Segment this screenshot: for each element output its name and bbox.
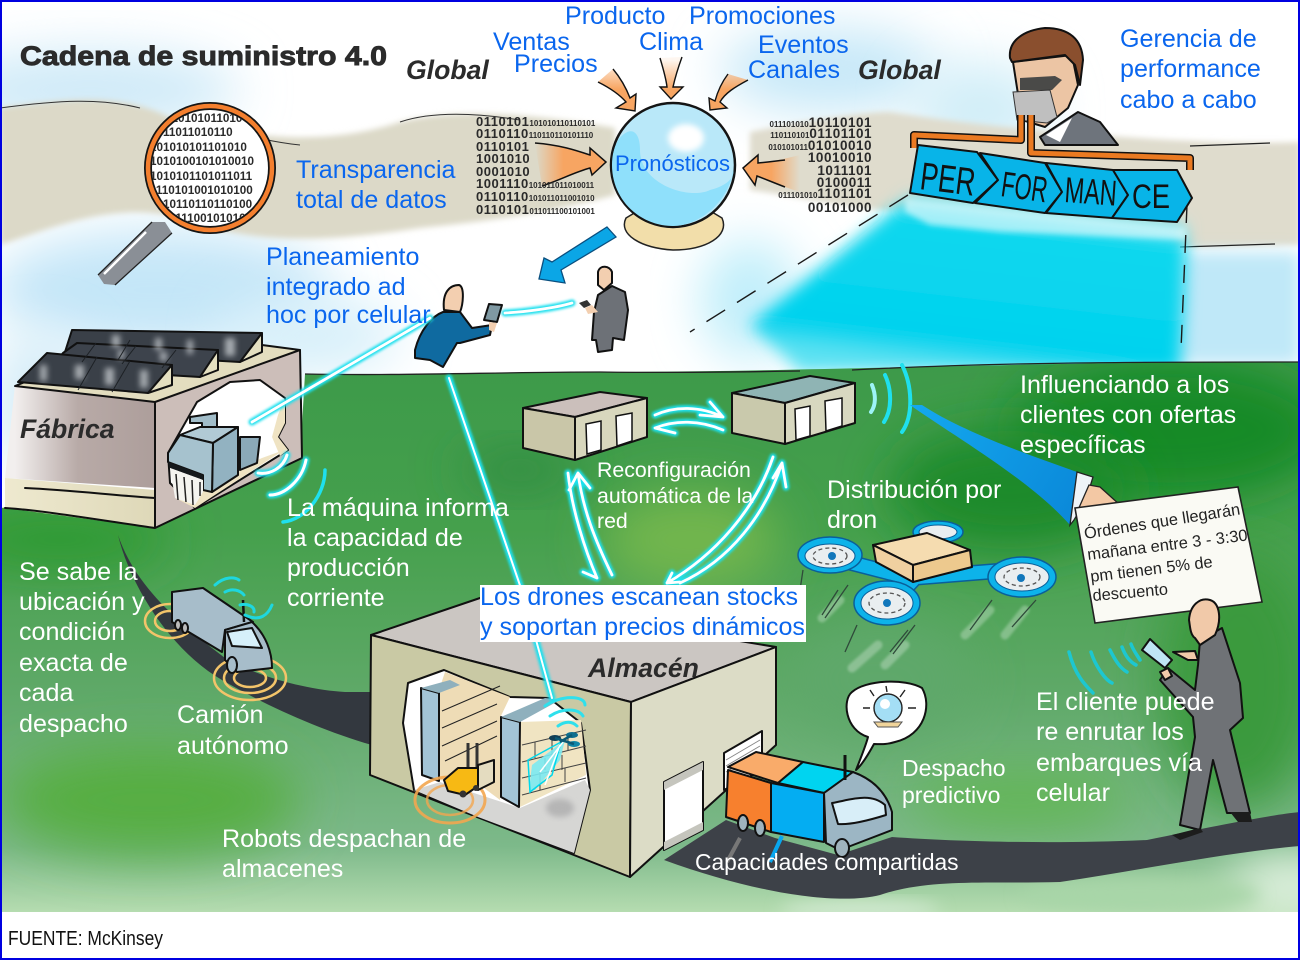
label: drone distribution: Distribución por — [827, 476, 1001, 504]
label: machine reports: corriente — [287, 584, 385, 612]
sleeve and hand pointing — [910, 405, 1122, 525]
label: influencing customers: clientes con ofertas — [1020, 401, 1236, 429]
label: location and condition — [19, 558, 145, 738]
label: integrated planning: integrado ad — [266, 273, 406, 301]
package box — [873, 533, 972, 582]
cyan performance light beam — [690, 195, 1187, 372]
mini warehouse one — [523, 392, 647, 460]
label: location and condition: despacho — [19, 710, 128, 738]
magnifying glass: 1010101101011011 — [150, 170, 253, 183]
panel: warehouse — [370, 598, 776, 877]
label: influencing customers: específicas — [1020, 431, 1146, 459]
label: integrated planning: Planeamiento — [266, 243, 419, 271]
binary data right: 0100011 — [817, 175, 872, 190]
blue arrow from crystal ball to planner — [539, 227, 616, 283]
label: predictive dispatch: Despacho — [902, 755, 1006, 781]
man in data glasses — [1010, 28, 1118, 145]
label: machine reports: la capacidad de — [287, 524, 463, 552]
panel: factory — [5, 330, 302, 528]
binary data left: 1001010 — [476, 151, 530, 166]
binary data left: 0110101101010110110101 — [476, 114, 596, 129]
loading doors — [664, 731, 762, 850]
label: robots: Robots despachan de — [222, 825, 466, 853]
factory machine cut-away — [168, 380, 288, 508]
magnifying glass: 1110101001010100 — [150, 184, 253, 197]
label: machine reports — [287, 494, 509, 612]
label: customer can re-route: celular — [1036, 779, 1110, 807]
forecast inputs: Clima — [639, 28, 703, 56]
binary data left: 0110110101011011001010 — [476, 189, 595, 204]
label: network reconfiguration: automática de la — [597, 484, 753, 508]
label: total data transparency — [296, 156, 456, 214]
forecast inputs: Ventas — [493, 28, 570, 56]
label: robots: almacenes — [222, 855, 343, 883]
label: customer can re-route: re enrutar los — [1036, 718, 1184, 746]
link glow — [252, 303, 786, 698]
label: location and condition: cada — [19, 679, 73, 707]
forecast inputs — [493, 2, 849, 84]
magnifying glass: 1011011010110 — [150, 126, 233, 139]
label: customer can re-route: embarques vía — [1036, 749, 1202, 777]
binary data left: 0110110110110110101110 — [476, 126, 594, 141]
delivery truck shared capacity — [726, 752, 892, 862]
colleague person with phone — [579, 267, 628, 352]
link core — [252, 303, 786, 698]
binary data right: 00101000 — [808, 200, 872, 215]
discount note paper: mañana entre 3 - 3:30 — [1086, 526, 1249, 564]
label: robots — [222, 825, 466, 883]
magnifying glass: 011011100101010 — [150, 212, 246, 225]
label: location and condition: Se sabe la — [19, 558, 138, 586]
label: end to end performance management: cabo a cabo — [1120, 86, 1257, 114]
binary data right — [768, 115, 872, 215]
label: forecasts: Pronósticos — [615, 151, 730, 176]
label: autonomous truck: autónomo — [177, 732, 289, 760]
magnifying glass: 101010101101010 — [150, 141, 247, 154]
label: network reconfiguration: red — [597, 509, 628, 533]
label: end to end performance management: Gerencia de — [1120, 25, 1257, 53]
label: predictive dispatch — [902, 755, 1006, 808]
label: network reconfiguration: Reconfiguración — [597, 458, 751, 482]
panel: drone distribution — [798, 521, 1056, 668]
binary data right: 0111010101101101 — [778, 186, 872, 201]
wifi signal over warehouse — [545, 698, 585, 726]
robot forklift — [415, 743, 494, 823]
truck on left road — [145, 578, 286, 700]
drone frame — [798, 521, 1056, 625]
label: total data transparency: Transparencia — [296, 156, 456, 184]
speech bubble with crystal ball — [847, 682, 926, 770]
performance banner: PER — [918, 155, 978, 205]
label: drone distribution — [827, 476, 1001, 534]
discount note paper: Órdenes que llegarán — [1083, 500, 1241, 543]
performance banner: MAN — [1063, 169, 1118, 214]
discount note paper: pm tienen 5% de — [1089, 553, 1214, 586]
label: warehouse: Almacén — [587, 653, 699, 683]
label: autonomous truck: Camión — [177, 701, 263, 729]
label: factory: Fábrica — [20, 414, 115, 444]
planner person with tablet — [415, 285, 502, 367]
cyan data links — [252, 303, 786, 698]
warehouse drone with scan beam — [528, 732, 580, 792]
label: machine reports: producción — [287, 554, 410, 582]
label: global right: Global — [858, 55, 941, 85]
orange connection tubes — [914, 115, 1190, 170]
binary data right: 11011010101101101 — [770, 126, 872, 141]
discount note paper — [1075, 487, 1262, 623]
mini warehouse two — [732, 376, 855, 444]
binary data left: 0001010 — [476, 164, 530, 179]
binary data right: 10010010 — [808, 150, 872, 165]
orange arrows into crystal ball — [535, 57, 800, 192]
crystal ball — [611, 103, 735, 250]
label: integrated planning — [266, 243, 431, 329]
label: influencing customers — [1020, 371, 1236, 459]
green ground — [0, 360, 1300, 920]
source note: FUENTE: McKinsey — [8, 928, 163, 950]
label: customer can re-route: El cliente puede — [1036, 688, 1215, 716]
label: global left: Global — [406, 55, 489, 85]
label: autonomous truck — [177, 701, 289, 760]
customer with phone — [1142, 599, 1252, 840]
label: drone distribution: dron — [827, 506, 877, 534]
binary data left: 1001110101011011010011 — [476, 176, 595, 191]
label: location and condition: condición — [19, 618, 125, 646]
customer phone signal — [1069, 644, 1140, 693]
binary data left — [476, 114, 596, 217]
binary data left: 0110101011011100101001 — [476, 202, 595, 217]
label: end to end performance management — [1120, 25, 1261, 114]
magnifying glass: 1010110110110100 — [150, 198, 253, 211]
title: Cadena de suministro 4.0 — [20, 41, 387, 71]
binary data right: 01010101101010010 — [768, 138, 872, 153]
forecast inputs: Promociones — [689, 2, 835, 30]
label: drones scan stocks: Los drones escanean stocks — [480, 583, 798, 611]
label: machine reports: La máquina informa — [287, 494, 509, 522]
performance banner — [910, 145, 1192, 222]
rotor motion streaks — [800, 570, 1036, 668]
label: customer can re-route — [1036, 688, 1215, 807]
label: drones scan stocks: y soportan precios dinámicos — [480, 613, 805, 641]
binary data right: 01110101010110101 — [770, 115, 872, 130]
solar panels — [18, 330, 262, 393]
wifi arcs by network warehouse — [871, 365, 910, 432]
forecast inputs: Producto — [565, 2, 665, 30]
right road — [664, 812, 1300, 899]
wifi arcs by factory — [258, 455, 325, 522]
left road — [118, 535, 372, 745]
performance banner: FOR — [999, 163, 1050, 210]
magnifying glass — [98, 106, 272, 285]
label: location and condition: exacta de — [19, 649, 128, 677]
forecast inputs: Canales — [748, 56, 840, 84]
forecast inputs: Precios — [514, 50, 598, 78]
footer white strip — [0, 912, 1300, 960]
discount note paper: descuento — [1092, 580, 1169, 605]
label: influencing customers: Influenciando a los — [1020, 371, 1229, 399]
label: end to end performance management: performance — [1120, 55, 1261, 83]
label: location and condition: ubicación y — [19, 588, 145, 616]
magnifying glass: 1010100101010010 — [150, 155, 255, 168]
label: total data transparency: total de datos — [296, 186, 447, 214]
label: predictive dispatch: predictivo — [902, 782, 1000, 808]
label: drones scan stocks — [480, 583, 806, 642]
forecast inputs: Eventos — [758, 31, 849, 59]
label: integrated planning: hoc por celular — [266, 301, 431, 329]
magnifying glass: 010101011010 — [165, 112, 243, 125]
performance banner: CE — [1132, 178, 1170, 216]
binary data left: 0110101 — [476, 139, 529, 154]
label: network reconfiguration — [597, 458, 753, 533]
label: shared capacities: Capacidades compartidas — [695, 849, 959, 875]
warehouse interior — [403, 670, 590, 853]
binary data right: 1011101 — [817, 163, 872, 178]
